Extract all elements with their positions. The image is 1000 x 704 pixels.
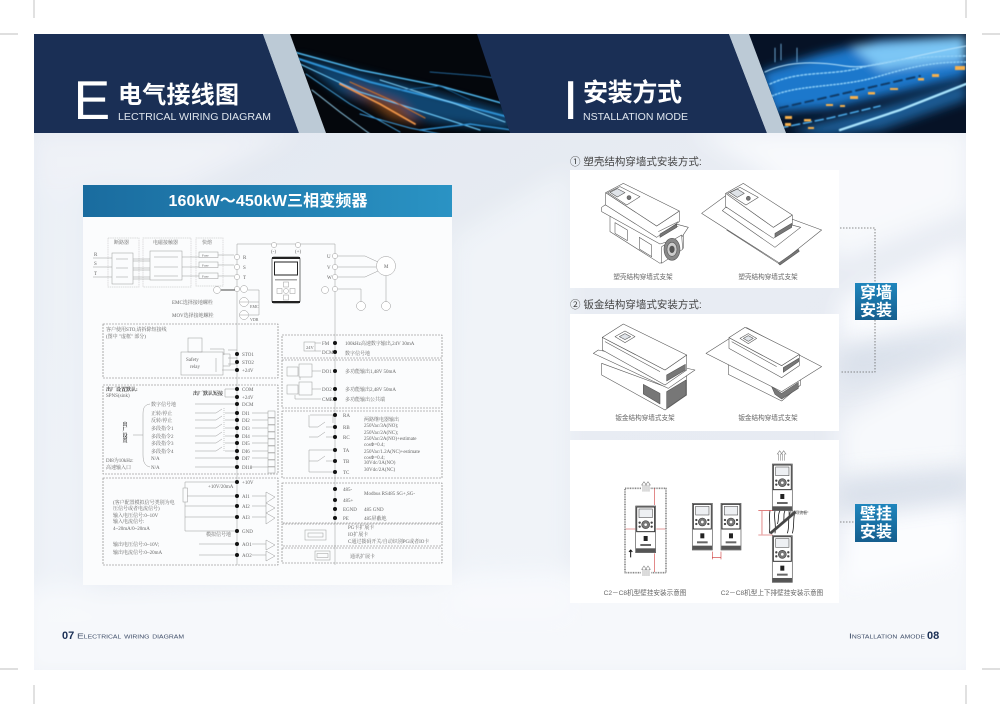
digital inputs box: N/A [151, 466, 160, 471]
input section: breaker, contactor, fuses: T [94, 272, 97, 277]
RS485 box: 485- [343, 488, 352, 493]
expansion card box: IO扩展卡 [348, 531, 368, 538]
relay box: cosΦ=0.4; [364, 456, 385, 461]
analog box: AO1 [242, 543, 252, 548]
input section: breaker, contactor, fuses: R [94, 253, 98, 258]
expansion card box: PG卡扩展卡 [348, 524, 374, 531]
digital inputs box: 多段指令1 [151, 425, 174, 432]
digital output box: 多功能输出1,48V 50mA [345, 368, 396, 375]
analog box: 输出电压信号:0~10V; [113, 541, 159, 548]
relay box: TB [343, 460, 350, 465]
digital inputs box: DCM [242, 403, 254, 408]
keypad: (-) [271, 250, 276, 255]
panel: molded case mounting [570, 170, 839, 288]
analog box: +10V/20mA [208, 485, 234, 490]
digital output box [282, 360, 442, 408]
analog box: AI1 [242, 495, 250, 500]
STO box: Safety [186, 358, 199, 363]
digital inputs box: +24V [242, 396, 254, 401]
digital output box: CME [322, 398, 333, 403]
page background [34, 133, 966, 670]
STO box [103, 324, 278, 378]
RS485 box [282, 483, 442, 523]
analog box: AI2 [242, 505, 250, 510]
heading: molded case: ① 塑壳结构穿墙式安装方式: [570, 155, 702, 168]
digital output box: DO2 [322, 388, 332, 393]
digital inputs box: DI6 [242, 450, 250, 455]
digital inputs box: SPNS(sink) [106, 394, 130, 399]
tab: wall mount install [855, 500, 897, 542]
drawing: sheet metal bracket A [593, 324, 695, 410]
input section: breaker, contactor, fuses: Fuse [202, 264, 209, 268]
motor output [322, 253, 396, 310]
expansion card box: C通过拨码开关/自动识别PG或者IO卡 [348, 538, 429, 545]
main buses [237, 244, 335, 565]
high-speed output box: 数字信号地 [345, 350, 370, 357]
RS485 box: 485 GND [364, 508, 384, 513]
digital inputs box: N/A [151, 457, 160, 462]
relay box: 250Vac/2A(NC); [364, 431, 398, 436]
relay box: cosΦ=0.4; [364, 443, 385, 448]
footer left [62, 630, 184, 642]
analog box: 输入电压信号:0~10V [113, 512, 159, 519]
analog box: GND [242, 530, 253, 535]
input section: breaker, contactor, fuses: MOV选择接地螺栓 [172, 312, 214, 319]
high-speed output box: FM [322, 342, 330, 347]
input section: breaker, contactor, fuses: R [243, 256, 247, 261]
STO box: relay [190, 365, 200, 370]
STO box: STO1 [242, 353, 254, 358]
digital inputs box: DI4 [242, 435, 250, 440]
analog box [103, 478, 278, 565]
motor output: V [327, 266, 331, 271]
digital inputs box: 设 [122, 432, 128, 439]
input section: breaker, contactor, fuses: Fuse [202, 254, 209, 258]
input section: breaker, contactor, fuses [93, 238, 259, 322]
expansion card box [282, 524, 442, 546]
heading: sheet metal: ② 钣金结构穿墙式安装方式: [570, 298, 702, 311]
digital inputs box: 多段指令3 [151, 440, 174, 447]
label: baffle: 隔热导流板 [788, 510, 807, 515]
digital inputs box: DI8为10kHz: [106, 457, 134, 464]
title: installation mode [563, 69, 688, 131]
footer left: 07 [62, 630, 74, 642]
input section: breaker, contactor, fuses: S [243, 266, 246, 271]
relay box: 30Vdc/2A(NC) [364, 468, 395, 473]
left header band [34, 34, 326, 133]
analog box: 输入电流信号: [113, 518, 144, 525]
digital inputs box: DI1 [242, 412, 250, 417]
connector: through-wall [840, 228, 875, 372]
input section: breaker, contactor, fuses: Fuse [202, 274, 209, 278]
relay box: 250Vac/1.2A(NC)+estimate [364, 450, 421, 455]
STO box: (图中 "虚框" 部分) [106, 333, 146, 340]
drawing: stacked units with baffle [758, 451, 808, 582]
input section: breaker, contactor, fuses: EMC选择接地螺栓 [172, 299, 213, 306]
footer right: 08 [927, 630, 939, 642]
header image: data wave [745, 30, 970, 136]
caption: 钣金结构穿墙式支架 [738, 413, 798, 422]
title: installation mode: I [563, 69, 578, 131]
connector: wall mount [840, 521, 855, 523]
digital inputs box: DI2 [242, 419, 250, 424]
input section: breaker, contactor, fuses: 快熔 [202, 239, 212, 246]
panel: wall mounting [570, 440, 839, 603]
title: electrical wiring diagram: LECTRICAL WIRING DIAGRAM [118, 112, 271, 123]
RS485 box: Modbus RS485 SG+,SG- [364, 492, 415, 497]
tab: through-wall install: 穿墙 [860, 279, 892, 303]
STO box: STO2 [242, 361, 254, 366]
digital output box: 多功能输出公共端 [345, 396, 385, 403]
caption: 钣金结构穿墙式支架 [615, 413, 675, 422]
caption: C2－C8机型上下排壁挂安装示意图 [721, 588, 824, 597]
digital inputs box: DI5 [242, 442, 250, 447]
digital inputs box: 数字信号地 [151, 401, 176, 408]
panel: wiring diagram [83, 185, 452, 585]
drawing: sheet metal bracket B [706, 327, 822, 401]
caption: 塑壳结构穿墙式支架 [613, 272, 673, 281]
tab: wall mount install: 壁挂 [860, 500, 892, 524]
title: electrical wiring diagram [74, 69, 271, 131]
relay box: 250Vac/2A(NO)+estimate [364, 437, 417, 442]
input section: breaker, contactor, fuses: VDR [250, 317, 259, 322]
communication card box [282, 548, 442, 563]
digital inputs box: 多段指令4 [151, 448, 174, 455]
digital inputs box: 置 [122, 437, 128, 444]
digital inputs box: 出厂设置默认: [106, 386, 138, 393]
relay box: TC [343, 471, 350, 476]
footer right: Installation amode [849, 632, 926, 640]
title: installation mode: 安装方式 [583, 73, 682, 109]
STO box: +24V [242, 369, 254, 374]
input section: breaker, contactor, fuses: EMC [250, 304, 259, 309]
communication card box: 通讯扩展卡 [350, 553, 375, 560]
relay box: RC [343, 436, 350, 441]
motor output: U [327, 255, 331, 260]
relay box: 两路继电器输出 [364, 416, 399, 423]
digital output box: DO1 [322, 370, 332, 375]
high-speed output box: 100kHz高速数字输出,24V 30mA [345, 340, 415, 347]
digital inputs box: 反转/停止 [151, 417, 172, 424]
analog box: 输出电流信号:0~20mA [113, 549, 162, 556]
analog box: 模拟信号地 [206, 531, 231, 538]
digital inputs box: DI18 [242, 466, 253, 471]
caption: C2－C8机型壁挂安装示意图 [604, 588, 687, 597]
drawing: single unit clearance [625, 482, 666, 576]
title: electrical wiring diagram: E [74, 69, 110, 131]
motor output: M [384, 265, 389, 270]
header image: light streaks [290, 34, 510, 133]
analog box: 压信号或者电流信号) [113, 505, 160, 512]
digital inputs box [103, 385, 278, 474]
relay box [282, 411, 442, 478]
digital inputs box: 出厂默认短接 [193, 390, 224, 397]
keypad [271, 242, 301, 303]
drawing: side by side units [692, 503, 741, 559]
digital inputs box: COM [242, 388, 254, 393]
digital inputs box: 厂 [122, 426, 128, 433]
tab: wall mount install: 安装 [860, 518, 892, 542]
digital inputs box: DI3 [242, 427, 250, 432]
input section: breaker, contactor, fuses: 电磁接触器 [153, 239, 178, 246]
panel: sheet metal mounting [570, 314, 839, 431]
heading banner [83, 185, 452, 217]
tab: through-wall install: 安装 [860, 296, 892, 320]
digital inputs box: 正转/停止 [151, 410, 172, 417]
caption: 塑壳结构穿墙式支架 [738, 272, 798, 281]
motor output: W [327, 276, 332, 281]
footer right [849, 630, 939, 642]
title: installation mode: NSTALLATION MODE [583, 112, 688, 123]
input section: breaker, contactor, fuses: 断路器 [114, 239, 129, 246]
relay box: RB [343, 426, 350, 431]
high-speed output box: DCM [322, 351, 334, 356]
footer left: Electrical wiring diagram [77, 632, 184, 640]
RS485 box: EGND [343, 508, 357, 513]
analog box: +10V [242, 481, 254, 486]
digital output box: 多功能输出2,48V 50mA [345, 386, 396, 393]
input section: breaker, contactor, fuses: T [243, 276, 246, 281]
analog box: 4~20mA/0~20mA [113, 527, 150, 532]
RS485 box: 485屏蔽地 [364, 515, 387, 522]
RS485 box: 485+ [343, 499, 354, 504]
RS485 box: PE [343, 517, 349, 522]
STO box: 客户使用STO,请拆除短接线 [106, 326, 167, 333]
title: electrical wiring diagram: 电气接线图 [118, 75, 239, 110]
relay box: 30Vdc/3A(NO) [364, 461, 396, 466]
high-speed output box [282, 335, 442, 358]
drawing: molded case bracket B [702, 183, 822, 265]
wiring schematic [93, 238, 442, 565]
digital inputs box: 多段指令2 [151, 433, 174, 440]
drawing: molded case bracket A [602, 183, 688, 263]
digital inputs box: 出 [122, 421, 128, 428]
tab: through-wall install [855, 279, 897, 320]
relay box: TA [343, 449, 350, 454]
keypad: (+) [295, 250, 301, 255]
relay box: 250Vac/3A(NO); [364, 424, 398, 429]
heading banner: 160kW～450kW三相变频器 [168, 191, 368, 210]
input section: breaker, contactor, fuses: S [94, 262, 97, 267]
analog box: (客户配置模拟信号类别为电 [113, 499, 175, 506]
digital inputs box: 高速输入口 [106, 464, 131, 471]
high-speed output box: 24V [306, 345, 314, 350]
relay box: RA [343, 414, 350, 419]
analog box: AI3 [242, 516, 250, 521]
digital inputs box: DI7 [242, 457, 250, 462]
right header band [477, 34, 786, 133]
analog box: AO2 [242, 554, 252, 559]
